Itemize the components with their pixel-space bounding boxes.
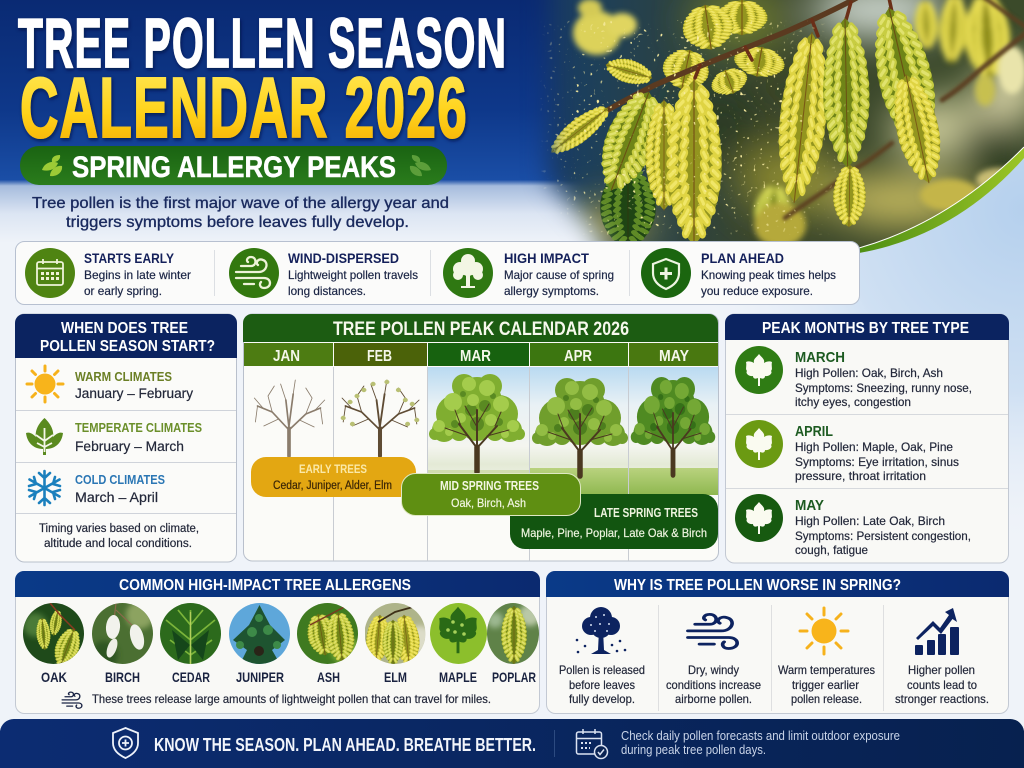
feature: plan ahead: you reduce exposure. — [701, 284, 813, 298]
feature: plan ahead — [641, 248, 836, 298]
row: May: High Pollen: Late Oak, Birch — [795, 514, 945, 528]
icon: calendar check — [576, 729, 608, 758]
row: April: Symptoms: Eye irritation, sinus — [795, 455, 959, 469]
hero photo: tree catkins releasing pollen — [534, 0, 1024, 248]
timing note — [39, 523, 199, 550]
allergen: elm: ELM — [384, 669, 407, 685]
row: April: High Pollen: Maple, Oak, Pine — [795, 440, 953, 454]
sky and grass scenery — [428, 367, 718, 495]
band: late spring trees: LATE SPRING TREES — [594, 506, 698, 520]
reason: warm temperatures: trigger earlier — [792, 678, 859, 692]
feature: plan ahead: Knowing peak times helps — [701, 268, 836, 282]
panel: why is tree pollen worse in spring — [546, 571, 1009, 714]
month headers — [244, 343, 718, 366]
band: late spring trees: Maple, Pine, Poplar, Late Oak & Birch — [521, 526, 707, 540]
feature: high impact: allergy symptoms. — [504, 284, 599, 298]
heading: COMMON HIGH-IMPACT TREE ALLERGENS — [119, 577, 411, 594]
row: April: pressure, throat irritation — [795, 469, 926, 483]
heading: WHEN DOES TREE — [61, 320, 188, 337]
feature: high impact — [443, 248, 614, 298]
allergen: oak: OAK — [41, 669, 67, 685]
sprigs — [551, 106, 608, 154]
row: warm climates: January – February — [75, 386, 193, 401]
allergen: cedar — [160, 603, 221, 685]
allergen: cedar: CEDAR — [172, 669, 210, 685]
timing note: Timing varies based on climate, — [39, 523, 199, 535]
allergen: ash — [297, 603, 359, 685]
footer tip — [621, 729, 900, 757]
curved green band — [859, 147, 1024, 253]
allergen note: These trees release large amounts of lightweight pollen that can travel for miles. — [92, 692, 491, 706]
feature: starts early: or early spring. — [84, 284, 162, 298]
band: early trees: Cedar, Juniper, Alder, Elm — [273, 480, 392, 492]
month headers: JAN — [273, 348, 300, 365]
row: temperate climates: February – March — [75, 439, 184, 454]
band: late spring trees — [510, 494, 718, 549]
tree: May deep green — [631, 377, 715, 475]
row: March: High Pollen: Oak, Birch, Ash — [795, 366, 943, 380]
allergen: ash: ASH — [317, 669, 340, 685]
reason: warm temperatures — [778, 608, 875, 706]
allergen: elm — [365, 603, 426, 682]
band: early trees: EARLY TREES — [299, 462, 367, 476]
main branch — [606, 0, 860, 111]
reason: pollen before leaves: fully develop. — [569, 692, 635, 706]
reason: dry windy conditions: airborne pollen. — [675, 692, 752, 706]
reason: dry windy conditions — [666, 614, 761, 706]
heading — [40, 320, 215, 355]
footer bar — [0, 719, 1024, 768]
panel: tree pollen peak calendar — [243, 314, 718, 561]
row: March: itchy eyes, congestion — [795, 395, 911, 409]
allergen: poplar: POPLAR — [492, 669, 536, 685]
feature: high impact: HIGH IMPACT — [504, 250, 589, 266]
heading: WHY IS TREE POLLEN WORSE IN SPRING? — [614, 577, 901, 594]
row: cold climates: March – April — [75, 490, 158, 505]
feature: plan ahead: PLAN AHEAD — [701, 250, 784, 266]
month headers: APR — [564, 348, 592, 365]
reason: warm temperatures: Warm temperatures — [778, 663, 875, 677]
feature: starts early — [25, 248, 191, 298]
tree: March full canopy — [429, 374, 525, 472]
reason: warm temperatures: pollen release. — [791, 692, 862, 706]
panel: when does tree pollen season start — [15, 314, 237, 562]
reason: dry windy conditions: conditions increase — [666, 678, 761, 692]
footer tip: during peak tree pollen days. — [621, 743, 766, 757]
subtitle pill: SPRING ALLERGY PEAKS — [72, 151, 396, 184]
row: March — [735, 346, 972, 409]
panel: common high-impact tree allergens — [15, 571, 541, 714]
panel: peak months by tree type — [725, 314, 1009, 563]
feature: wind dispersed — [229, 248, 418, 298]
feature: wind dispersed: Lightweight pollen travels — [288, 268, 418, 282]
title — [18, 4, 507, 156]
month headers: MAR — [460, 348, 491, 365]
rear branches — [785, 0, 1024, 218]
heading: PEAK MONTHS BY TREE TYPE — [762, 320, 969, 337]
month headers: MAY — [659, 348, 689, 365]
reason: dry windy conditions: Dry, windy — [688, 663, 739, 677]
allergen: juniper: JUNIPER — [236, 669, 284, 685]
allergen: birch — [92, 603, 153, 682]
intro text: Tree pollen is the first major wave of the allergy year and — [32, 195, 449, 212]
row: temperate climates: TEMPERATE CLIMATES — [75, 420, 202, 435]
row: warm climates: WARM CLIMATES — [75, 369, 172, 384]
timing note: altitude and local conditions. — [44, 538, 192, 550]
row: temperate climates — [26, 418, 202, 455]
reason: pollen before leaves — [559, 607, 645, 706]
tree: February budding — [341, 380, 419, 456]
row: March: Symptoms: Sneezing, runny nose, — [795, 381, 972, 395]
feature: high impact: Major cause of spring — [504, 268, 614, 282]
month headers: FEB — [367, 348, 392, 365]
feature: starts early: Begins in late winter — [84, 268, 191, 282]
calendar heading: TREE POLLEN PEAK CALENDAR 2026 — [333, 319, 629, 340]
top catkins — [717, 0, 767, 35]
reason: higher pollen counts: Higher pollen — [908, 663, 975, 677]
reason: higher pollen counts: stronger reactions. — [895, 692, 989, 706]
allergen: maple — [430, 603, 487, 685]
feature strip — [16, 242, 860, 304]
row: April: APRIL — [795, 423, 833, 440]
row: May: cough, fatigue — [795, 543, 868, 557]
row: cold climates: COLD CLIMATES — [75, 472, 165, 487]
row: May — [735, 494, 971, 557]
row: May: MAY — [795, 497, 824, 514]
band: early trees — [251, 457, 416, 497]
allergen: maple: MAPLE — [439, 669, 477, 685]
slogan: KNOW THE SEASON. PLAN AHEAD. BREATHE BETTER. — [154, 735, 536, 755]
tree: April full canopy — [532, 378, 628, 476]
icon: shield — [113, 728, 138, 758]
row: warm climates — [27, 366, 193, 402]
heading: POLLEN SEASON START? — [40, 338, 215, 355]
footer tip: Check daily pollen forecasts and limit outdoor exposure — [621, 729, 900, 743]
band: mid spring trees: Oak, Birch, Ash — [451, 496, 526, 510]
intro text: triggers symptoms before leaves fully develop. — [66, 214, 409, 231]
reason: higher pollen counts: counts lead to — [907, 678, 977, 692]
band: mid spring trees — [402, 474, 580, 516]
catkins — [601, 92, 658, 190]
allergen: oak — [23, 603, 85, 685]
tree: January bare — [254, 380, 325, 456]
row: cold climates — [29, 471, 165, 505]
reason: pollen before leaves: Pollen is released — [559, 663, 645, 677]
band: mid spring trees: MID SPRING TREES — [440, 479, 539, 493]
feature: wind dispersed: WIND-DISPERSED — [288, 250, 399, 266]
allergen: birch: BIRCH — [105, 669, 140, 685]
feature: starts early: STARTS EARLY — [84, 250, 175, 266]
row: May: Symptoms: Persistent congestion, — [795, 529, 971, 543]
row: April — [735, 420, 959, 483]
title: CALENDAR 2026 — [20, 61, 468, 156]
allergen: juniper — [229, 603, 290, 685]
icon: right leaves — [410, 155, 431, 176]
icon: wind — [62, 692, 82, 708]
feature: wind dispersed: long distances. — [288, 284, 366, 298]
icon: left leaves — [42, 155, 62, 176]
row: March: MARCH — [795, 349, 845, 366]
reason: higher pollen counts — [895, 608, 989, 706]
intro text — [32, 195, 449, 231]
allergen: poplar — [487, 603, 541, 685]
reason: pollen before leaves: before leaves — [569, 678, 635, 692]
title: TREE POLLEN SEASON — [18, 4, 507, 82]
